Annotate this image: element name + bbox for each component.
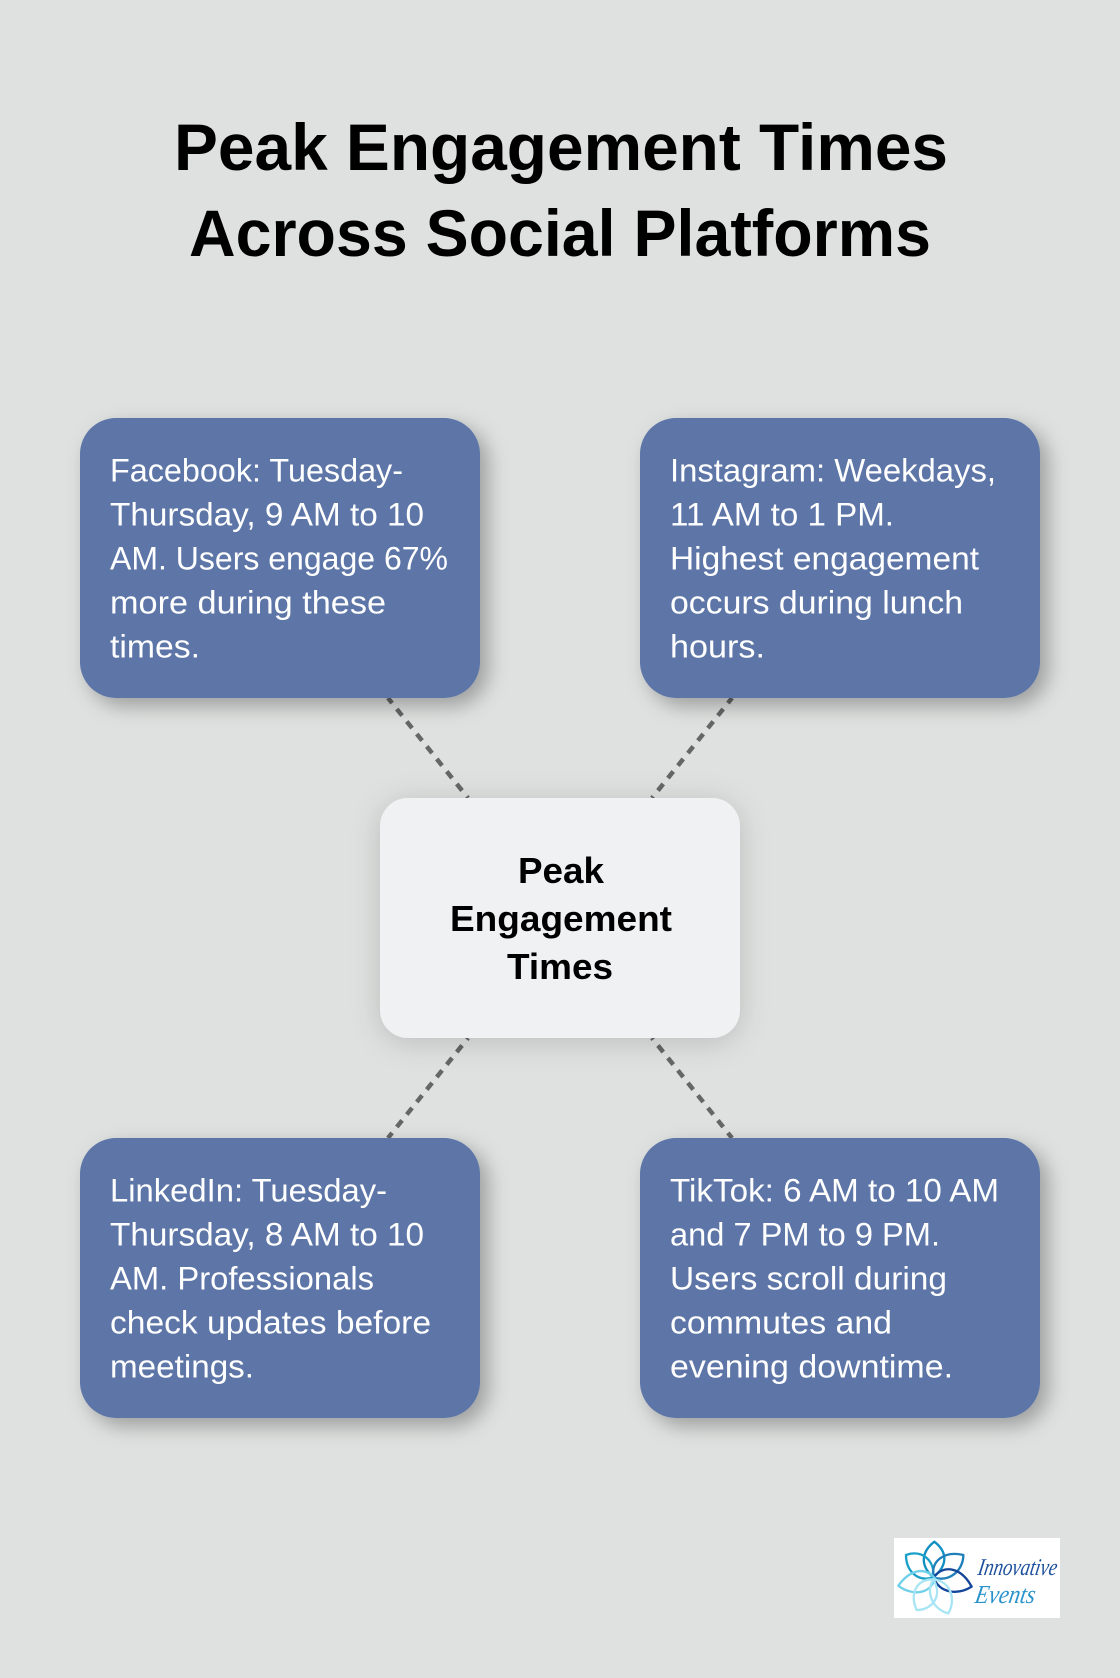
center hub text: Engagement [450,898,672,939]
TikTok text: and 7 PM to 9 PM. [670,1216,940,1252]
logo wordmark [972,1554,1060,1609]
icon: lotus flower [898,1542,972,1613]
logo: Innovative Events [894,1538,1060,1618]
connector: Instagram to center [652,698,732,798]
LinkedIn text: LinkedIn: Tuesday- [110,1172,387,1208]
panel: LinkedIn [80,1138,480,1418]
connector: TikTok to center [652,1038,732,1138]
title: Across Social Platforms [189,196,931,270]
panel: Instagram [640,418,1040,698]
TikTok text: evening downtime. [670,1348,953,1384]
LinkedIn text: AM. Professionals [110,1260,374,1296]
Instagram text: Instagram: Weekdays, [670,452,996,488]
LinkedIn text [110,1172,431,1384]
Instagram text [670,452,996,664]
TikTok text: commutes and [670,1304,892,1340]
Facebook text: Thursday, 9 AM to 10 [110,496,424,532]
title [174,110,948,270]
panel: Facebook [80,418,480,698]
LinkedIn text: Thursday, 8 AM to 10 [110,1216,424,1252]
Instagram text: Highest engagement [670,540,979,576]
connector: Facebook to center [388,698,468,798]
Facebook text: AM. Users engage 67% [110,540,448,576]
Instagram text: occurs during lunch [670,584,963,620]
LinkedIn text: check updates before [110,1304,431,1340]
panel: center hub [380,798,740,1038]
TikTok text [670,1172,999,1384]
title: Peak Engagement Times [174,110,948,184]
Facebook text: more during these [110,584,386,620]
center hub text: Times [507,946,613,987]
logo wordmark: Events [972,1580,1038,1609]
Instagram text: hours. [670,628,765,664]
Facebook text: times. [110,628,200,664]
center hub text [450,850,672,987]
logo wordmark: Innovative [975,1554,1060,1581]
TikTok text: Users scroll during [670,1260,947,1296]
LinkedIn text: meetings. [110,1348,254,1384]
panel: TikTok [640,1138,1040,1418]
Instagram text: 11 AM to 1 PM. [670,496,894,532]
Facebook text: Facebook: Tuesday- [110,452,403,488]
Facebook text [110,452,448,664]
center hub text: Peak [518,850,605,891]
TikTok text: TikTok: 6 AM to 10 AM [670,1172,999,1208]
connector: LinkedIn to center [388,1038,468,1138]
